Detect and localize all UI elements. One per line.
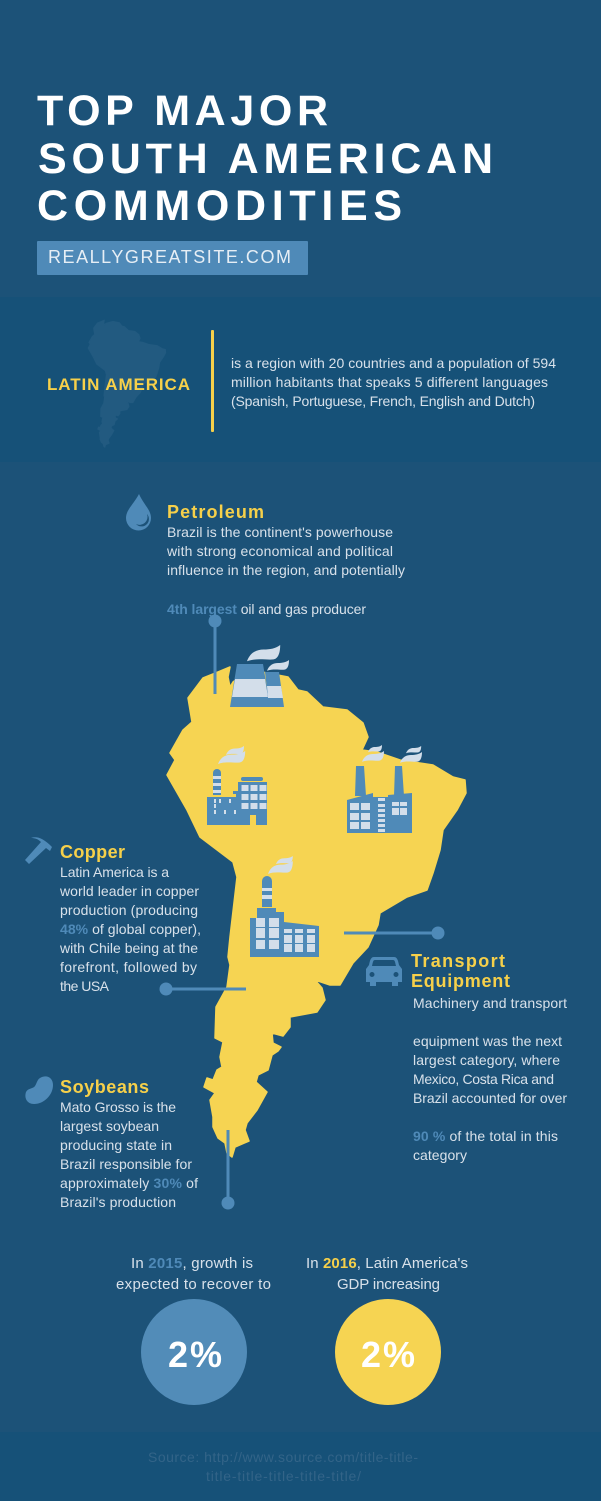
text: 2016 caption: In 2016, Latin America's	[306, 1255, 468, 1272]
pin: Transport	[344, 926, 444, 940]
vertical divider	[211, 330, 214, 432]
text: Transport description: Machinery and transport	[413, 995, 567, 1011]
footer band background	[0, 1432, 601, 1501]
source note: title-title-title-title-title/	[206, 1468, 361, 1484]
heading: Transport Equipment	[411, 951, 510, 991]
icon: oil drop	[126, 494, 151, 530]
source note	[148, 1449, 418, 1484]
text: Copper description: production (producing	[60, 902, 198, 918]
map of South America	[167, 667, 466, 1157]
text: 2016 caption: GDP increasing	[337, 1276, 440, 1293]
text: Soybeans description	[60, 1099, 198, 1210]
panel: Petroleum	[126, 494, 405, 694]
heading: Latin America: LATIN AMERICA	[47, 375, 190, 394]
icon: car	[366, 957, 402, 986]
stat: 2016 GDP	[306, 1255, 468, 1405]
text: 2015 caption: In 2015, growth is	[131, 1255, 253, 1272]
pin: Copper	[160, 982, 246, 996]
heading: Petroleum: Petroleum	[167, 502, 264, 522]
text: Petroleum description: influence in the region, and potentially	[167, 562, 405, 578]
icon: factory bottom	[250, 856, 319, 957]
text: 2015 caption	[116, 1255, 271, 1293]
icon: soybean	[25, 1076, 53, 1104]
icon: hammer	[25, 837, 52, 864]
intro text: is a region with 20 countries and a population of 594	[231, 355, 556, 371]
text: Transport description: category	[413, 1147, 467, 1163]
text: 2015 caption: expected to recover to	[116, 1276, 271, 1293]
intro text: million habitants that speaks 5 different languages	[231, 374, 548, 390]
text: Soybeans description: largest soybean	[60, 1118, 159, 1134]
icon: cooling towers	[230, 645, 289, 707]
text: Copper description: forefront, followed by	[60, 959, 197, 975]
panel: Transport Equipment	[344, 926, 567, 1163]
text: Petroleum description	[166, 524, 405, 617]
panel: Latin America intro	[47, 320, 556, 447]
text: Copper description: the USA	[60, 978, 110, 994]
intro band background	[0, 297, 601, 462]
website badge: REALLYGREATSITE.COM	[48, 247, 291, 267]
panel: Copper	[25, 837, 246, 996]
pin: Petroleum	[208, 614, 222, 694]
heading: Soybeans: Soybeans	[60, 1077, 149, 1097]
stat: 2015 growth	[116, 1255, 271, 1405]
heading: Transport Equipment: Equipment	[411, 971, 510, 991]
text: Transport description: Brazil accounted for over	[413, 1090, 567, 1106]
panel: Soybeans	[25, 1076, 234, 1210]
website badge	[37, 241, 308, 275]
text: Transport description: largest category, where	[413, 1052, 560, 1068]
text: Soybeans description: producing state in	[60, 1137, 172, 1153]
circle: 2% yellow: 2%	[361, 1334, 415, 1375]
text: Copper description	[59, 864, 201, 994]
intro text	[231, 355, 556, 409]
text: 2016 caption	[306, 1255, 468, 1293]
heading: Transport Equipment: Transport	[411, 951, 505, 971]
circle: 2% yellow	[335, 1299, 441, 1405]
intro text: (Spanish, Portuguese, French, English and Dutch)	[231, 393, 535, 409]
source note: Source: http://www.source.com/title-title-	[148, 1449, 418, 1465]
title: SOUTH AMERICAN	[38, 135, 493, 183]
heading: Copper: Copper	[60, 842, 125, 862]
circle: 2% blue: 2%	[168, 1334, 222, 1375]
text: Copper description: Latin America is a	[60, 864, 169, 880]
text: Soybeans description: Mato Grosso is the	[60, 1099, 176, 1115]
text: Petroleum description: 4th largest oil and gas producer	[167, 601, 366, 617]
text: Petroleum description: Brazil is the continent's powerhouse	[167, 524, 393, 540]
title: TOP MAJOR	[37, 87, 328, 135]
text: Petroleum description: with strong economical and political	[166, 543, 393, 559]
text: Soybeans description: Brazil's production	[60, 1194, 176, 1210]
text: Transport description	[413, 995, 567, 1163]
icon: factory right	[347, 745, 422, 833]
text: Transport description: 90 % of the total in this	[413, 1128, 558, 1144]
text: Transport description: Mexico, Costa Rica and	[413, 1071, 554, 1087]
circle: 2% blue	[141, 1299, 247, 1405]
text: Copper description: world leader in copper	[59, 883, 199, 899]
icon: factory left	[207, 746, 267, 825]
text: Copper description: 48% of global copper),	[60, 921, 201, 937]
text: Copper description: with Chile being at the	[59, 940, 198, 956]
text: Soybeans description: approximately 30% of	[60, 1175, 198, 1191]
text: Soybeans description: Brazil responsible for	[60, 1156, 192, 1172]
text: Transport description: equipment was the next	[413, 1033, 562, 1049]
title: COMMODITIES	[37, 182, 402, 230]
pin: Soybeans	[222, 1130, 234, 1210]
title	[37, 87, 493, 230]
icon: faint continent silhouette	[88, 320, 166, 447]
